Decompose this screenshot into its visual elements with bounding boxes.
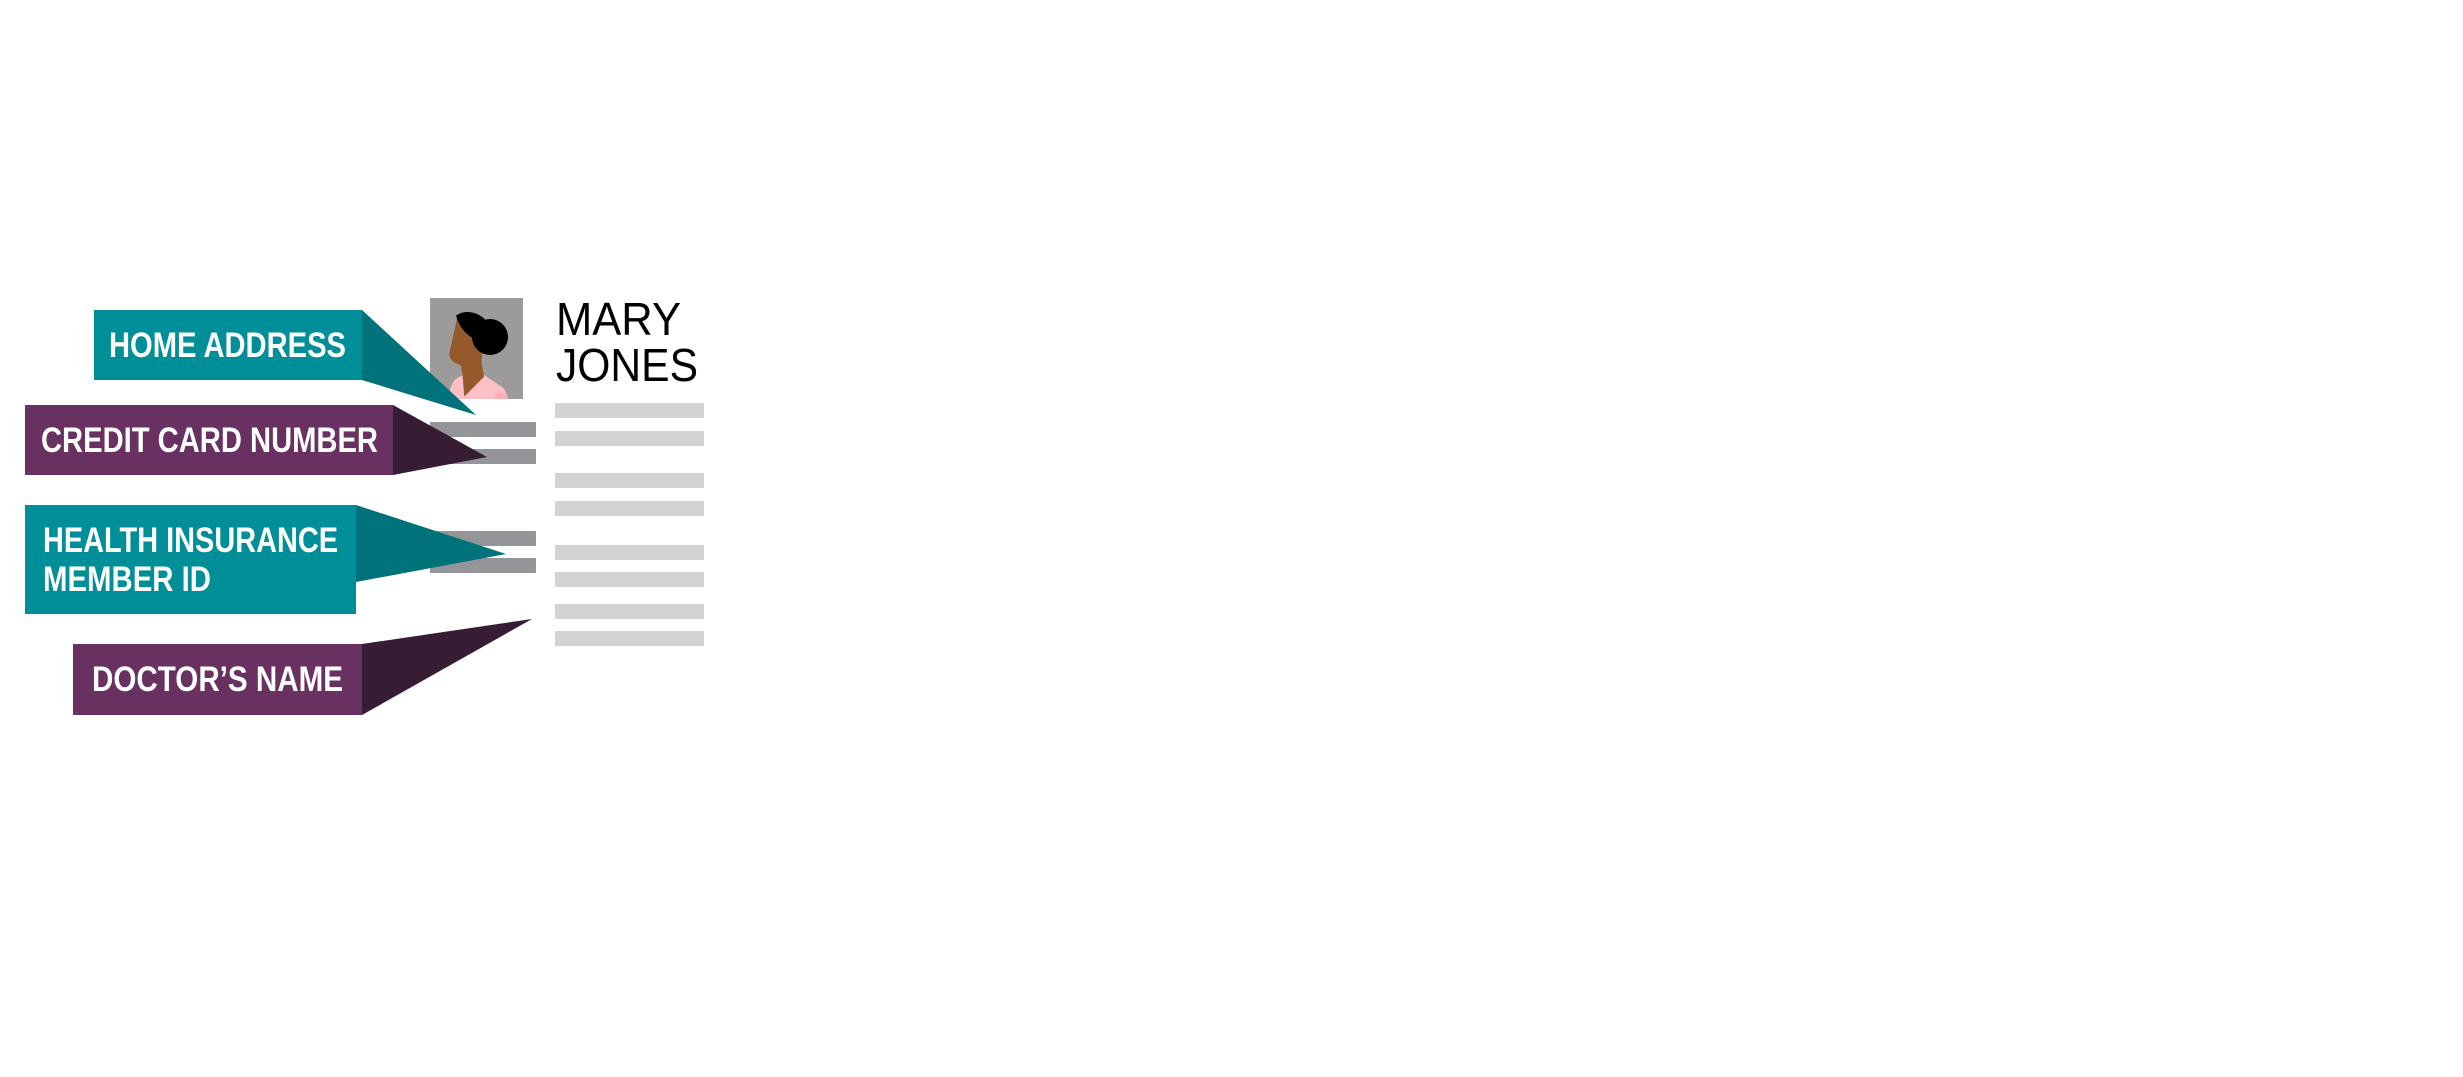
callout: home address: HOME ADDRESS bbox=[109, 326, 346, 365]
name: Mary Jones bbox=[556, 293, 698, 391]
callout: health insurance member id bbox=[25, 505, 506, 614]
infographic: medical record with callouts bbox=[25, 298, 704, 715]
callout: health insurance member id: MEMBER ID bbox=[43, 560, 211, 599]
portrait photo bbox=[430, 298, 523, 406]
name: Mary Jones: MARY bbox=[556, 293, 681, 345]
callout: doctor's name: DOCTOR’S NAME bbox=[92, 660, 343, 699]
callout: credit card number bbox=[25, 405, 487, 475]
name: Mary Jones: JONES bbox=[556, 339, 698, 391]
callout: home address bbox=[94, 310, 476, 415]
dark grey text lines bbox=[430, 422, 536, 573]
callout: health insurance member id: HEALTH INSURANCE bbox=[43, 521, 338, 560]
callout: credit card number: CREDIT CARD NUMBER bbox=[41, 421, 378, 460]
light grey text lines bbox=[555, 403, 704, 646]
callout: doctor's name bbox=[73, 619, 532, 715]
